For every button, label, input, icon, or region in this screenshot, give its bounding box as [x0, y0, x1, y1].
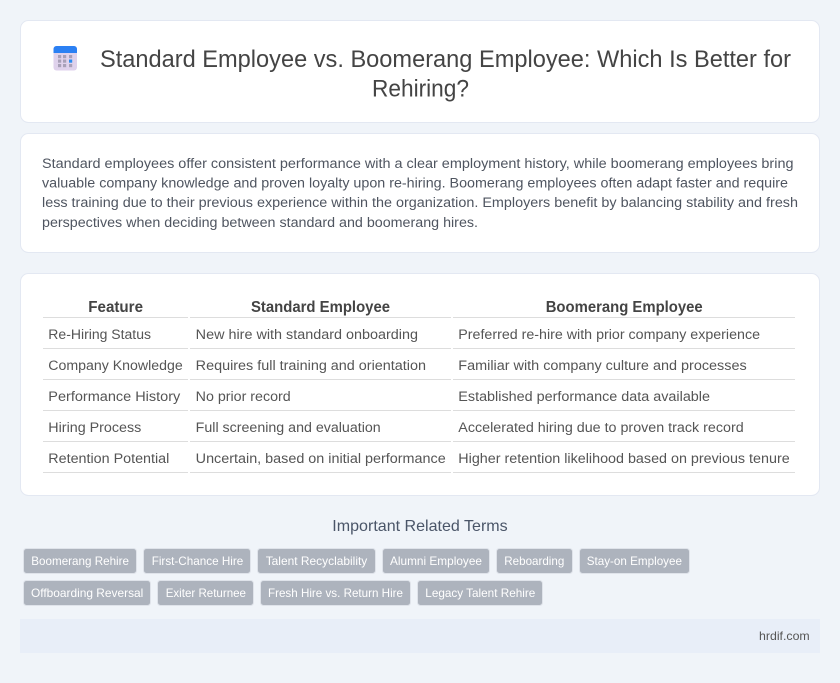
table header [88, 299, 703, 316]
summary paragraph: less training due to their previous experience within the organization. Employers benefit by balancing stability and fresh [42, 195, 798, 211]
footer band [20, 619, 820, 653]
footer source: hrdif.com [759, 629, 810, 643]
row: hiring process: Accelerated hiring due to proven track record [458, 420, 744, 436]
row: performance history [48, 389, 710, 405]
heading: related terms: Important Related Terms [332, 518, 508, 535]
table header: Boomerang Employee [546, 299, 703, 316]
tag: Boomerang Rehire [24, 548, 136, 574]
tag: Stay-on Employee [580, 548, 690, 574]
row: company knowledge: Familiar with company culture and processes [458, 358, 747, 374]
panel: title card [20, 20, 820, 122]
tag: Offboarding Reversal [24, 580, 150, 606]
table header: Feature [88, 299, 143, 316]
row: retention potential: Uncertain, based on initial performance [196, 451, 446, 467]
tag: Fresh Hire vs. Return Hire [260, 580, 410, 606]
tag: Offboarding Reversal: Offboarding Reversal [31, 586, 143, 600]
row: performance history: No prior record [196, 389, 291, 405]
row: re-hiring status [48, 327, 760, 343]
related term tags [24, 548, 690, 606]
table header: Standard Employee [251, 299, 390, 316]
row: hiring process: Hiring Process [48, 420, 141, 436]
row: company knowledge: Requires full training and orientation [196, 358, 426, 374]
title: Rehiring? [372, 76, 469, 102]
tag: Talent Recyclability: Talent Recyclability [266, 554, 367, 568]
tag: Alumni Employee [382, 548, 490, 574]
row: retention potential: Retention Potential [48, 451, 169, 467]
summary paragraph: perspectives when deciding between standard and boomerang hires. [42, 215, 478, 231]
tag: Reboarding [496, 548, 572, 574]
summary paragraph: Standard employees offer consistent performance with a clear employment history, while boomerang employees bring [42, 156, 793, 172]
tag: Stay-on Employee: Stay-on Employee [587, 554, 682, 568]
row: retention potential: Higher retention likelihood based on previous tenure [458, 451, 790, 467]
tag: Legacy Talent Rehire: Legacy Talent Rehire [425, 586, 536, 600]
tag: Exiter Returnee: Exiter Returnee [166, 586, 246, 600]
tag: Reboarding: Reboarding [504, 554, 564, 568]
row: company knowledge [48, 358, 747, 374]
tag: First-Chance Hire [144, 548, 250, 574]
panel: summary text [20, 134, 820, 252]
row: hiring process [48, 420, 744, 436]
row: re-hiring status: New hire with standard onboarding [196, 327, 418, 343]
tag: Alumni Employee: Alumni Employee [390, 554, 482, 568]
row: re-hiring status: Re-Hiring Status [48, 327, 151, 343]
summary paragraph: valuable company knowledge and proven loyalty upon re-hiring. Boomerang employees often adapt faster and require [42, 176, 788, 192]
tag: Boomerang Rehire: Boomerang Rehire [31, 554, 129, 568]
row: company knowledge: Company Knowledge [48, 358, 183, 374]
summary paragraph [42, 156, 798, 231]
tag: First-Chance Hire: First-Chance Hire [152, 554, 244, 568]
tag: Fresh Hire vs. Return Hire: Fresh Hire vs. Return Hire [268, 586, 403, 600]
panel: comparison table [20, 274, 820, 496]
row: re-hiring status: Preferred re-hire with prior company experience [458, 327, 760, 343]
icon: calendar [54, 46, 77, 70]
row: performance history: Established performance data available [458, 389, 710, 405]
row: retention potential [48, 451, 790, 467]
row: performance history: Performance History [48, 389, 181, 405]
title: Standard Employee vs. Boomerang Employee: Which Is Better for [100, 46, 791, 73]
title [100, 46, 791, 102]
tag: Exiter Returnee [158, 580, 254, 606]
tag: Talent Recyclability [258, 548, 376, 574]
tag: Legacy Talent Rehire [418, 580, 542, 606]
row: hiring process: Full screening and evaluation [196, 420, 381, 436]
